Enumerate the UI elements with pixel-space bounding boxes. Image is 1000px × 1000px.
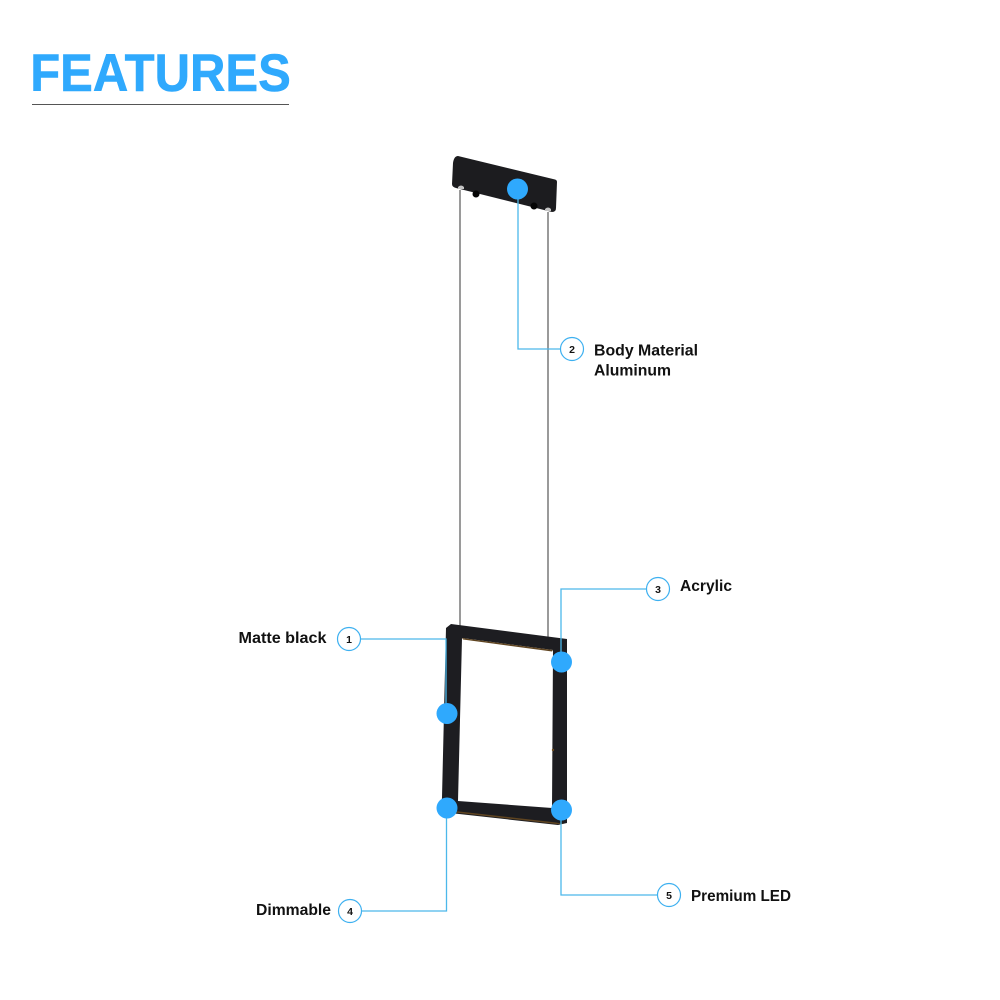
callout 4: dimmable: 4 (347, 906, 353, 918)
callout 3: acrylic (551, 578, 732, 672)
suspension cables (460, 190, 548, 637)
callout 4: dimmable: Dimmable (256, 902, 331, 919)
callout 2: body material (507, 178, 698, 380)
callout 2: body material: 2 (569, 344, 575, 356)
callout 1: matte black (238, 628, 458, 724)
callout 5: premium LED (551, 800, 791, 906)
callout 1: matte black: Matte black (238, 630, 327, 647)
callout 3: acrylic: Acrylic (680, 578, 732, 595)
callout 1: matte black: 1 (346, 634, 352, 646)
callout 5: premium LED: Premium LED (691, 888, 791, 905)
callout 4: dimmable (256, 798, 458, 922)
callout 2: body material: Aluminum (594, 362, 671, 380)
title: FEATURES (30, 44, 291, 103)
callout 2: body material: Body Material (594, 342, 698, 360)
callout 5: premium LED: 5 (666, 890, 672, 902)
title underline (32, 104, 289, 105)
canopy mount (452, 156, 557, 212)
pendant light frame (441, 624, 567, 825)
callout 3: acrylic: 3 (655, 584, 661, 596)
